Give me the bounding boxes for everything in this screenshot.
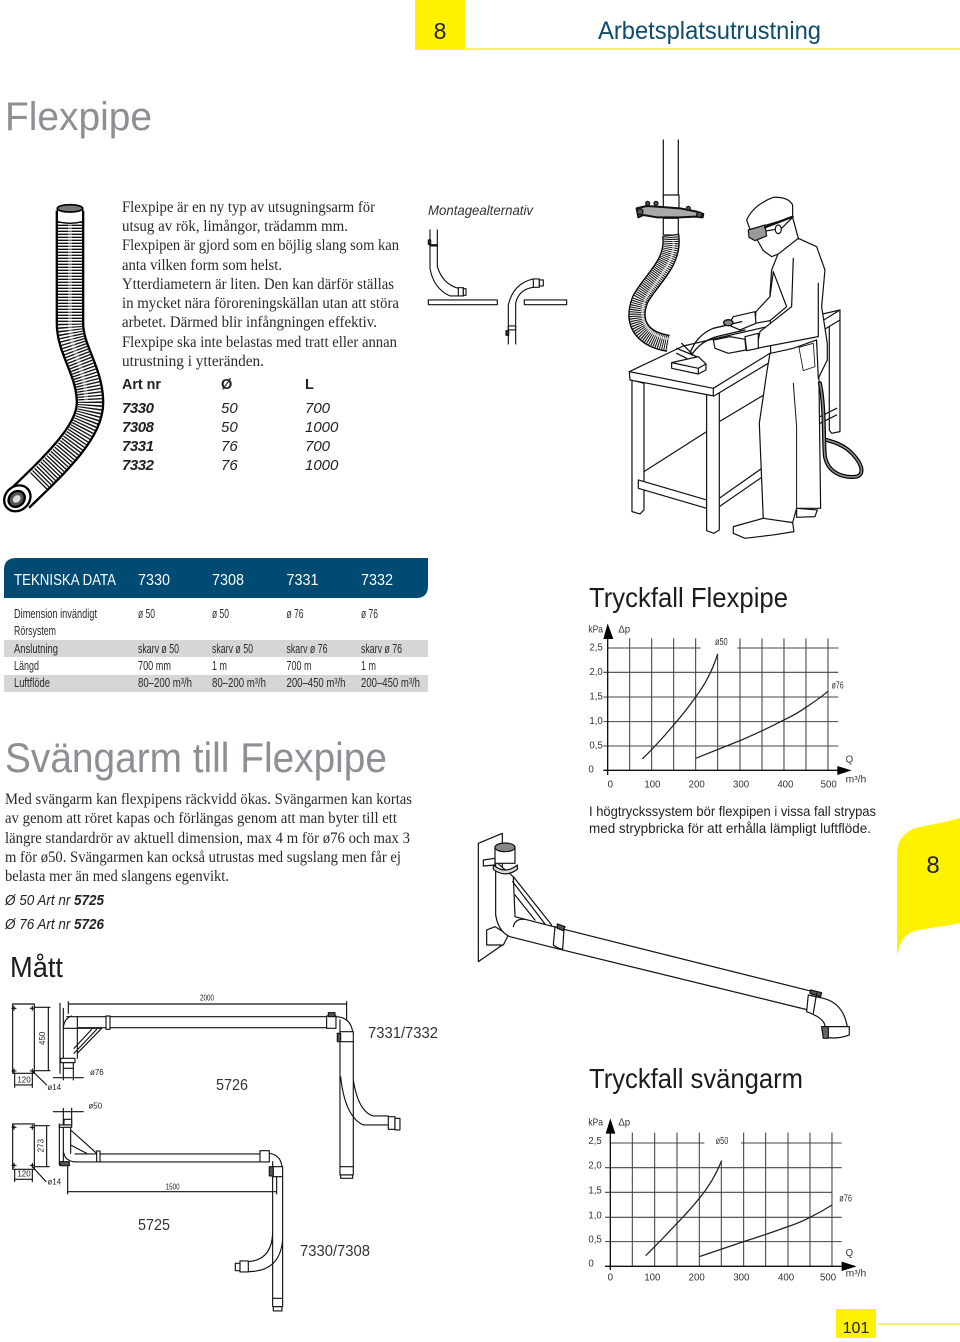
chart: pressure drop svängarm: 0 (588, 1259, 594, 1270)
dimension drawing: 5725 (12, 1102, 283, 1311)
dimension drawing: 5725: 1500 (166, 1182, 180, 1191)
dimension drawing: 5725: ø14 (47, 1178, 62, 1187)
table rows: ø 76 (286, 607, 304, 621)
text block: Svängarm description: längre standardrör av aktuell dimension, max 4 m för ø76 och max 3 (5, 830, 410, 847)
chart: pressure drop Flexpipe: 100 (644, 779, 660, 790)
work bench (629, 310, 840, 533)
table rows: skarv ø 76 (286, 642, 328, 656)
chart: pressure drop Flexpipe: ø76 (832, 680, 844, 691)
table rows: Dimension invändigt (14, 607, 97, 621)
heading: Mått: Mått (10, 952, 63, 984)
table: technical data (4, 558, 428, 692)
chart: pressure drop svängarm: 400 (778, 1273, 794, 1284)
dimension drawing: 5726 (12, 993, 400, 1178)
table: article numbers: 1000 (305, 419, 339, 436)
header band (415, 0, 960, 50)
chart: pressure drop svängarm: 2,0 (588, 1161, 602, 1172)
text block: Svängarm description: Med svängarm kan flexpipens räckvidd ökas. Svängarmen kan kortas (5, 791, 412, 808)
label: 5725: 5725 (138, 1217, 170, 1234)
icon: mounting alternatives (428, 230, 567, 344)
chart: pressure drop svängarm: 200 (689, 1273, 705, 1284)
chart: pressure drop svängarm: 0 (608, 1273, 613, 1284)
chart: pressure drop Flexpipe: ø50 (715, 637, 728, 648)
dimension drawing: 5726: 120 (17, 1075, 31, 1084)
chart: pressure drop svängarm: ø76 (839, 1193, 852, 1204)
table rows: ø 50 (212, 607, 229, 621)
text block: Flexpipe description: anta vilken form som helst. (122, 257, 282, 274)
text block: Flexpipe description: Flexpipen är gjord som en böjlig slang som kan (122, 237, 399, 254)
text block: Flexpipe description: Ytterdiametern är liten. Den kan därför ställas (122, 276, 394, 293)
text block: Flexpipe description: Flexpipe ska inte belastas med tratt eller annan (122, 334, 397, 351)
label: 7331/7332: 7331/7332 (368, 1025, 438, 1042)
table: article numbers: L (305, 377, 314, 393)
table: article numbers: 76 (221, 438, 238, 455)
text block: throttle note: med strypbricka för att erhålla lämpligt luftflöde. (589, 820, 871, 836)
table rows: 80–200 m³/h (212, 676, 266, 690)
chart: pressure drop Flexpipe: 0,5 (589, 740, 603, 751)
heading: Tryckfall Flexpipe: Tryckfall Flexpipe (589, 582, 788, 613)
chart: pressure drop Flexpipe: 200 (689, 779, 705, 790)
chart: pressure drop svängarm: 2,5 (588, 1136, 602, 1147)
chart: pressure drop svängarm: 100 (644, 1273, 660, 1284)
chart: pressure drop Flexpipe: 2,0 (589, 667, 603, 678)
table rows: skarv ø 50 (138, 642, 179, 656)
text block: Flexpipe description: in mycket nära föroreningskällan utan att störa (122, 295, 399, 312)
table: article numbers (122, 377, 339, 474)
article numbers: Svängarm (4, 893, 105, 933)
chart: pressure drop Flexpipe: 300 (733, 779, 749, 790)
chart: pressure drop svängarm: kPa (588, 1118, 604, 1129)
text block: Svängarm description: m för ø50. Svängarmen kan också utrustas med sugslang men får ej (5, 849, 401, 866)
header band: 8 (434, 18, 446, 44)
table header band: 7332 (361, 572, 393, 589)
dimension drawing: 5725: 273 (37, 1138, 46, 1152)
chart: pressure drop Flexpipe: kPa (588, 624, 604, 635)
table: article numbers: 76 (221, 457, 238, 474)
table: article numbers: 7331 (122, 438, 154, 455)
table rows: skarv ø 76 (361, 642, 402, 656)
table: article numbers: 50 (221, 419, 238, 436)
page number (836, 1309, 960, 1338)
article numbers: Svängarm: Ø 50 Art nr 5725 (4, 893, 105, 909)
table rows: ø 50 (138, 607, 155, 621)
chart: pressure drop Flexpipe (588, 623, 866, 790)
table header band: 7308 (212, 572, 244, 589)
title: Svängarm till Flexpipe: Svängarm till Flexpipe (5, 734, 387, 781)
chart: pressure drop Flexpipe: m³/h (846, 775, 866, 786)
chart: pressure drop Flexpipe: 500 (821, 779, 837, 790)
table header band: 7331 (286, 572, 318, 589)
chart: pressure drop Flexpipe: 1,0 (589, 716, 603, 727)
table: article numbers: Ø (221, 377, 232, 393)
table rows: Anslutning (14, 642, 58, 656)
chart: pressure drop svängarm: 0,5 (588, 1235, 602, 1246)
chart: pressure drop svängarm (588, 1118, 866, 1284)
table rows: Rörsystem (14, 624, 56, 638)
chart: pressure drop svängarm: Δp (618, 1118, 630, 1129)
label: Montagealternativ: Montagealternativ (428, 202, 534, 218)
table rows: 700 mm (138, 659, 171, 673)
side tab: chapter 8: 8 (926, 852, 940, 879)
text block: throttle note: I högtryckssystem bör flexpipen i vissa fall strypas (589, 803, 876, 819)
text block: Svängarm description: belasta mer än med slangens egenvikt. (5, 868, 229, 885)
chart: pressure drop svängarm: 500 (820, 1273, 836, 1284)
chart: pressure drop Flexpipe: Q (846, 755, 854, 766)
text block: Flexpipe description: Flexpipe är en ny typ av utsugningsarm för (122, 199, 376, 216)
chart: pressure drop Flexpipe: 0 (588, 765, 594, 776)
chart: pressure drop Flexpipe: 0 (608, 779, 613, 790)
label: 5726: 5726 (216, 1077, 248, 1094)
table rows: 200–450 m³/h (361, 676, 420, 690)
chart: pressure drop svängarm: 300 (733, 1273, 749, 1284)
text block: Flexpipe description: utrustning i ytteränden. (122, 353, 264, 370)
dimension drawing: 5725: ø50 (88, 1102, 103, 1111)
side tab: chapter 8 (897, 818, 960, 957)
text block: Svängarm description: av genom att röret kapas och förlängas genom att man byter till ett (5, 810, 398, 827)
table: article numbers: 50 (221, 400, 238, 417)
table: article numbers: Art nr (122, 377, 161, 393)
chart: pressure drop svängarm: ø50 (716, 1136, 728, 1147)
dimension drawing: 5726: ø76 (90, 1068, 104, 1077)
table header band: 7330 (138, 572, 170, 589)
chart: pressure drop Flexpipe: 2,5 (589, 643, 603, 654)
table header band: TEKNISKA DATA (14, 572, 117, 589)
flexible hose (637, 235, 674, 343)
dimension drawing: 5726: 450 (38, 1031, 47, 1045)
chart: pressure drop Flexpipe: 400 (777, 779, 793, 790)
chart: pressure drop svängarm: m³/h (846, 1269, 866, 1280)
chart: pressure drop Flexpipe: Δp (618, 624, 630, 635)
chart: pressure drop svängarm: 1,5 (588, 1185, 602, 1196)
chart: pressure drop svängarm: Q (846, 1248, 854, 1259)
table rows: 1 m (212, 659, 227, 673)
page number: 101 (843, 1320, 869, 1337)
exhaust pipe and bracket (637, 140, 703, 235)
dimension drawing: 5726: 2000 (200, 993, 214, 1002)
table rows: Luftflöde (14, 676, 50, 690)
text block: Flexpipe description: arbetet. Därmed blir infångningen effektiv. (122, 314, 377, 331)
table: article numbers: 700 (305, 400, 331, 417)
icon: flexible pipe illustration (0, 205, 90, 517)
label: 7330/7308: 7330/7308 (300, 1243, 370, 1260)
table rows: 200–450 m³/h (286, 676, 346, 690)
table: article numbers: 7332 (122, 457, 155, 474)
table rows: ø 76 (361, 607, 378, 621)
welder figure (713, 197, 827, 538)
chart: pressure drop Flexpipe: 1,5 (589, 691, 603, 702)
table: article numbers: 700 (305, 438, 331, 455)
article numbers: Svängarm: Ø 76 Art nr 5726 (4, 917, 105, 933)
table rows: skarv ø 50 (212, 642, 253, 656)
dimension drawing: 5725: 120 (17, 1170, 31, 1179)
text block: Flexpipe description (122, 199, 399, 370)
text block: throttle note (589, 803, 876, 836)
text block: Svängarm description (5, 791, 412, 885)
header band: Arbetsplatsutrustning (598, 17, 821, 45)
chart: pressure drop svängarm: 1,0 (588, 1210, 602, 1221)
icon: welder at work bench with flexpipe (629, 140, 862, 538)
table rows: 700 m (286, 659, 312, 673)
table rows: Längd (14, 659, 39, 673)
title: Flexpipe: Flexpipe (5, 95, 152, 139)
text block: Flexpipe description: utsug av rök, limångor, trädamm mm. (122, 218, 348, 235)
icon: swing arm illustration (478, 833, 849, 1038)
table rows: 80–200 m³/h (138, 676, 192, 690)
table: article numbers: 7308 (122, 419, 155, 436)
table rows (4, 607, 428, 692)
heading: Tryckfall svängarm: Tryckfall svängarm (589, 1063, 803, 1094)
table rows: 1 m (361, 659, 376, 673)
dimension drawing: 5726: ø14 (47, 1083, 62, 1092)
table: article numbers: 7330 (122, 400, 155, 417)
torch and sparks (677, 320, 745, 358)
gas hose (820, 383, 862, 477)
table header band (4, 558, 428, 598)
table: article numbers: 1000 (305, 457, 339, 474)
